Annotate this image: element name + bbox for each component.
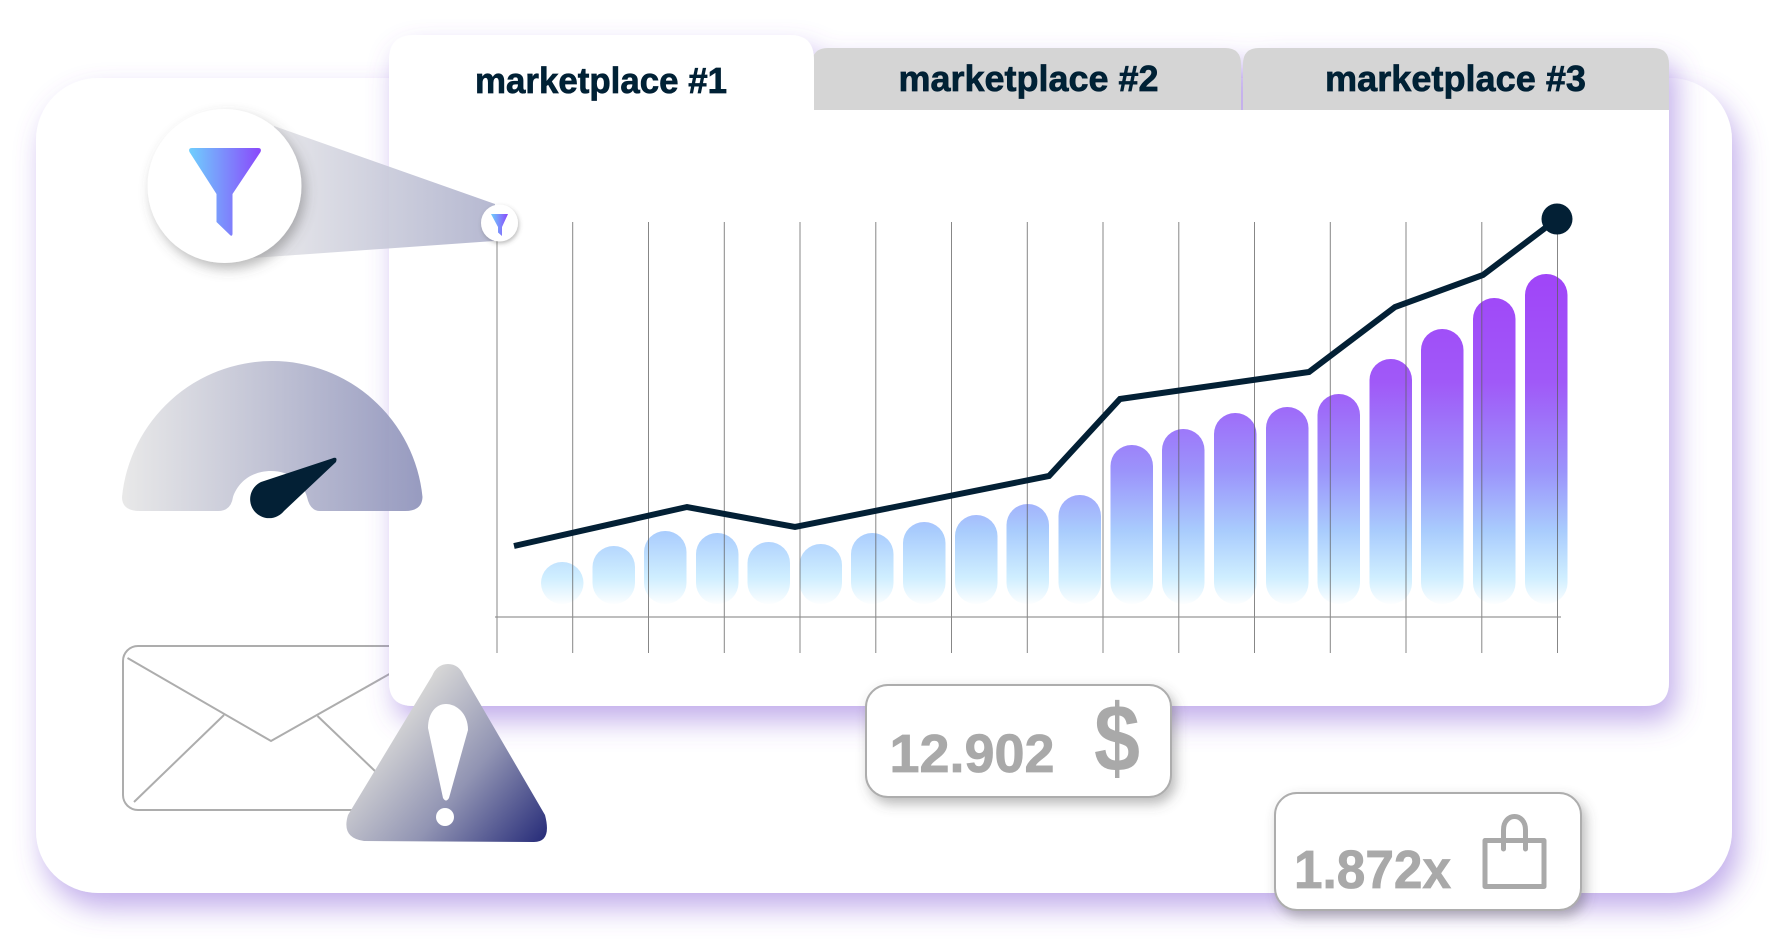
icon: large funnel circle [148, 109, 302, 263]
line chart [514, 204, 1572, 546]
tab: marketplace #1 and panel body: marketplace #1 [475, 60, 727, 101]
stat card: revenue: $ [1094, 685, 1140, 792]
stat card: revenue: 12.902 [890, 724, 1054, 784]
icon: shopping bag [1485, 816, 1544, 886]
panel: marketplace chart with tabs [389, 35, 1669, 706]
icon: warning triangle [346, 664, 547, 842]
icon: envelope [123, 646, 423, 810]
stat card: orders [1275, 793, 1581, 910]
tab: marketplace #3: marketplace #3 [1325, 58, 1586, 99]
icon: gauge [122, 361, 422, 518]
icon: small funnel circle [481, 204, 518, 242]
tab: marketplace #2: marketplace #2 [898, 58, 1158, 99]
stat card: orders: 1.872x [1294, 840, 1451, 900]
tab: marketplace #2 [812, 48, 1241, 110]
stat card: revenue [866, 685, 1171, 797]
zoom cone [253, 126, 495, 258]
chart: grid lines [495, 222, 1561, 653]
tab: marketplace #3 [1243, 48, 1669, 110]
bar chart [541, 274, 1568, 604]
